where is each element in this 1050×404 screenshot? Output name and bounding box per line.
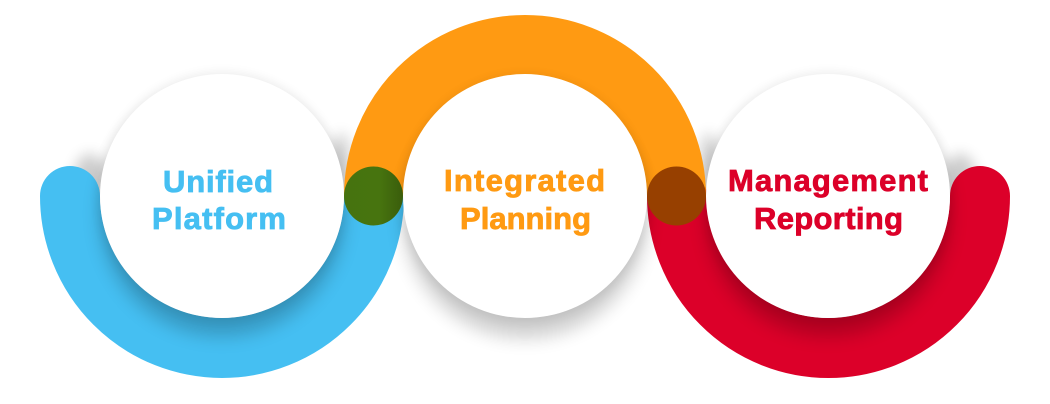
shadow: soft grey behind arc ends and orange arc — [74, 133, 976, 202]
circle: Integrated Planning — [403, 74, 647, 318]
panel: Unified Platform blue arc — [70, 196, 374, 348]
label: Unified Platform: Unified — [163, 164, 273, 199]
circle: Management Reporting — [706, 74, 950, 318]
overlap circle: brown — [647, 166, 706, 226]
label: Management Reporting: Reporting — [754, 201, 903, 236]
label: Integrated Planning: Planning — [460, 201, 591, 236]
overlap circle: green — [344, 166, 403, 226]
label: Unified Platform — [152, 164, 286, 236]
panel: Management Reporting red arc — [677, 196, 980, 348]
label: Management Reporting — [728, 163, 928, 236]
shadow: right circle — [704, 72, 952, 336]
label: Integrated Planning — [444, 163, 605, 236]
shadow: left circle — [98, 72, 346, 336]
label: Management Reporting: Management — [728, 163, 928, 198]
label: Integrated Planning: Integrated — [444, 163, 605, 198]
shadow: middle circle — [401, 74, 649, 338]
label: Unified Platform: Platform — [152, 201, 286, 236]
circle: Unified Platform — [100, 74, 344, 318]
panel: Integrated Planning orange arc — [374, 45, 676, 196]
